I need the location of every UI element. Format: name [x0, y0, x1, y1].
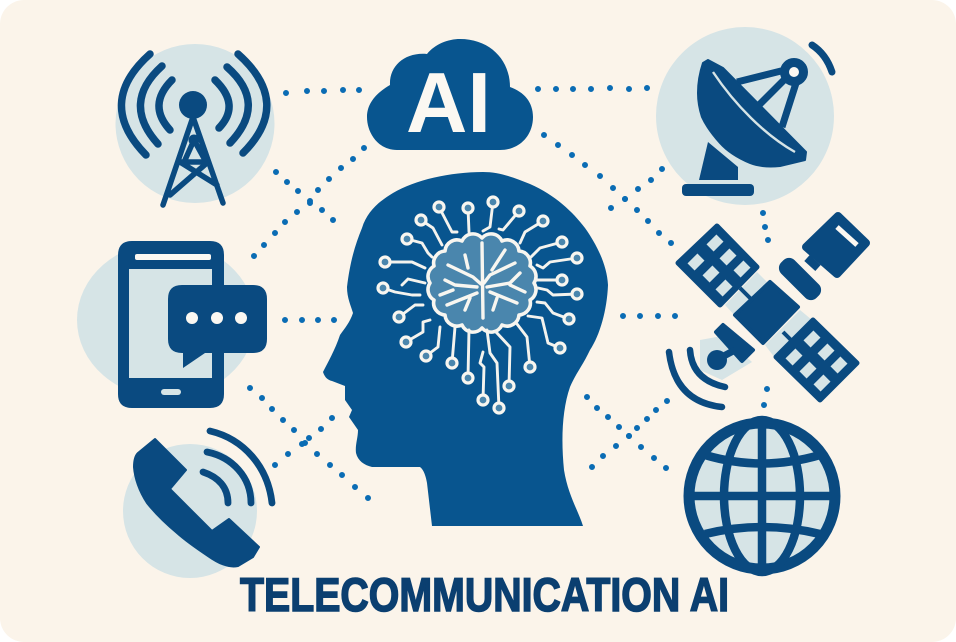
circuit traces: [383, 202, 577, 408]
icon: AI cloud: [367, 39, 533, 151]
dotted connectors: [250, 88, 768, 498]
icon: telephone handset: [123, 431, 272, 578]
head silhouette with AI brain: [323, 172, 608, 526]
solar panel lower: [776, 320, 857, 400]
satellite body: [735, 282, 798, 343]
icon: cell tower: [116, 44, 274, 205]
icon: smartphone with chat bubble: [77, 241, 267, 408]
satellite module: [806, 216, 866, 274]
satellite antenna: [716, 325, 753, 361]
icon: AI cloud: AI: [406, 56, 491, 151]
icon: satellite dish: [656, 27, 834, 205]
circuit nodes: [378, 197, 582, 413]
brain branches: [440, 243, 525, 318]
brain: [428, 234, 536, 332]
solar panel upper: [678, 226, 757, 305]
head: [323, 172, 608, 526]
icon: globe: [688, 420, 836, 572]
title: TELECOMMUNICATION AI: [240, 568, 729, 621]
icon: satellite: [669, 216, 866, 407]
